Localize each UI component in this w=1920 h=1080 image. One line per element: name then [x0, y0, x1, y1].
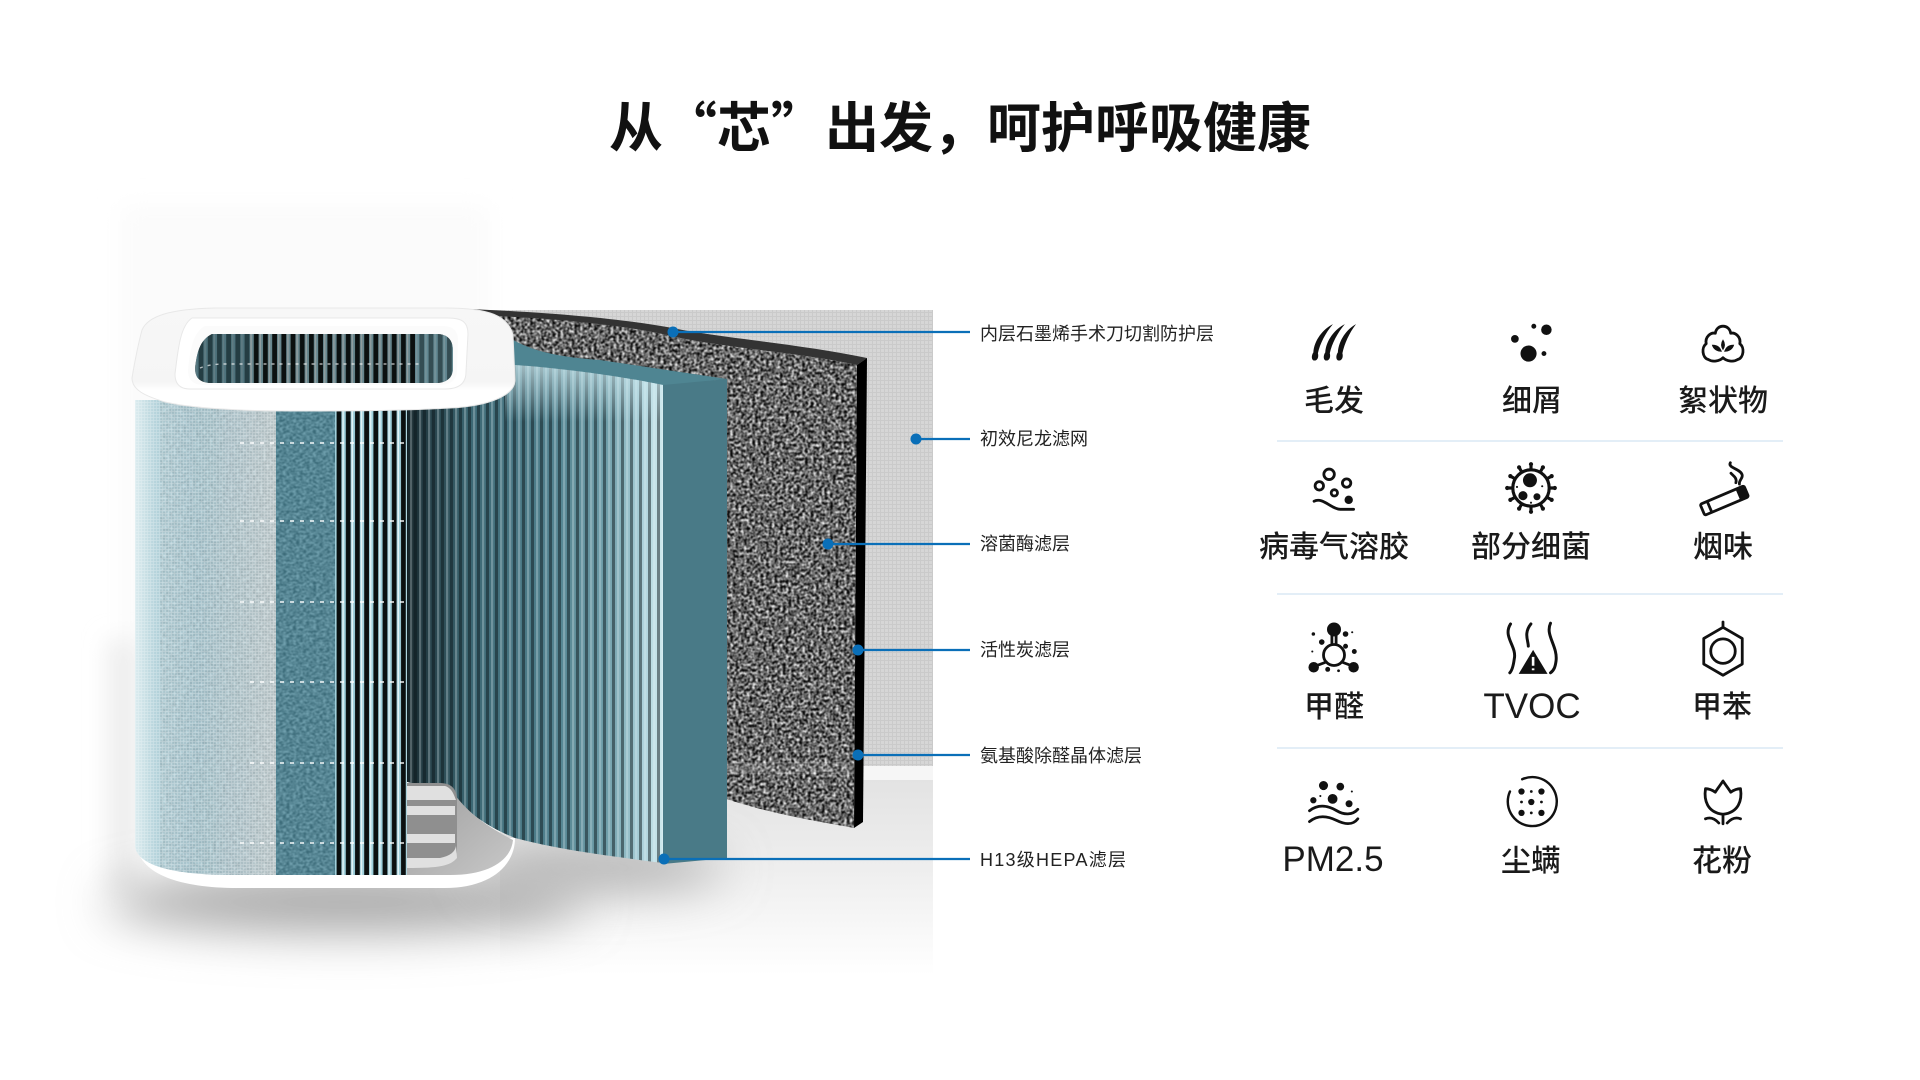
callout: HEPA layer — [658, 850, 1126, 870]
item: smoke: 烟味 — [1693, 531, 1753, 564]
icon: benzene — [1704, 622, 1742, 675]
callout: nylon filter: 初效尼龙滤网 — [980, 429, 1088, 449]
callout: nylon filter — [910, 429, 1088, 449]
pre-filter section — [135, 400, 277, 880]
item: TVOC: TVOC — [1483, 687, 1581, 726]
item: PM2.5: PM2.5 — [1282, 840, 1384, 879]
icon: mite — [1508, 777, 1557, 826]
callout: graphene layer — [668, 324, 1214, 344]
title: 从“芯”出发，呵护呼吸健康 — [609, 84, 1311, 163]
icon: debris — [1511, 324, 1552, 362]
item: lint: 絮状物 — [1678, 385, 1768, 418]
callout: carbon layer: 活性炭滤层 — [980, 640, 1070, 660]
floor shadow — [105, 300, 993, 1020]
callout: HEPA layer: H13级HEPA滤层 — [980, 850, 1126, 870]
top lid — [132, 308, 515, 411]
enzyme section — [276, 400, 336, 880]
icon: formaldehyde — [1308, 622, 1359, 672]
icon: tvoc — [1508, 623, 1556, 674]
lid opening — [175, 318, 468, 389]
icon: pm2.5 — [1310, 781, 1358, 824]
frame dashes — [240, 443, 407, 843]
icon: hair — [1312, 324, 1356, 361]
icon: flower — [1705, 781, 1741, 824]
HEPA pleated layer — [400, 332, 727, 870]
icon: cotton — [1703, 326, 1743, 361]
item: pollen — [1692, 781, 1752, 878]
soft backdrop — [120, 205, 490, 855]
item: dust mites: 尘螨 — [1501, 845, 1561, 878]
icon: cigarette — [1700, 463, 1750, 516]
callout: amino acid layer: 氨基酸除醛晶体滤层 — [980, 746, 1142, 766]
icon: aerosol — [1314, 469, 1354, 509]
item: virus aerosol — [1259, 469, 1409, 564]
item: hair — [1304, 324, 1364, 418]
item: lint — [1678, 326, 1768, 418]
callout: carbon layer — [852, 640, 1070, 660]
callout: lysozyme layer: 溶菌酶滤层 — [980, 534, 1070, 554]
item: formaldehyde — [1304, 622, 1364, 724]
item: pollen: 花粉 — [1692, 845, 1752, 878]
activated carbon sheet — [470, 305, 870, 835]
row dividers — [1277, 441, 1783, 748]
item: bacteria — [1471, 462, 1591, 564]
item: virus aerosol: 病毒气溶胶 — [1259, 531, 1409, 564]
item: formaldehyde: 甲醛 — [1304, 691, 1364, 724]
item: PM2.5 — [1282, 781, 1384, 879]
item: debris — [1502, 324, 1562, 418]
pleat section — [335, 400, 407, 880]
item: dust mites — [1501, 777, 1561, 878]
nylon mesh panel — [470, 310, 933, 766]
callout: lysozyme layer — [822, 534, 1070, 554]
base plate — [137, 783, 515, 888]
item: toluene: 甲苯 — [1692, 691, 1752, 724]
item: smoke — [1693, 463, 1753, 564]
item: bacteria: 部分细菌 — [1471, 531, 1591, 564]
item: hair: 毛发 — [1304, 385, 1364, 418]
callout: graphene layer: 内层石墨烯手术刀切割防护层 — [980, 324, 1214, 344]
product illustration: exploded filter cartridge — [105, 205, 993, 1020]
item: debris: 细屑 — [1502, 385, 1562, 418]
icon: bacteria — [1505, 462, 1557, 514]
cartridge front cutaway — [135, 400, 407, 880]
callout: amino acid layer — [852, 746, 1142, 766]
item: TVOC — [1483, 623, 1581, 726]
item: toluene — [1692, 622, 1752, 724]
